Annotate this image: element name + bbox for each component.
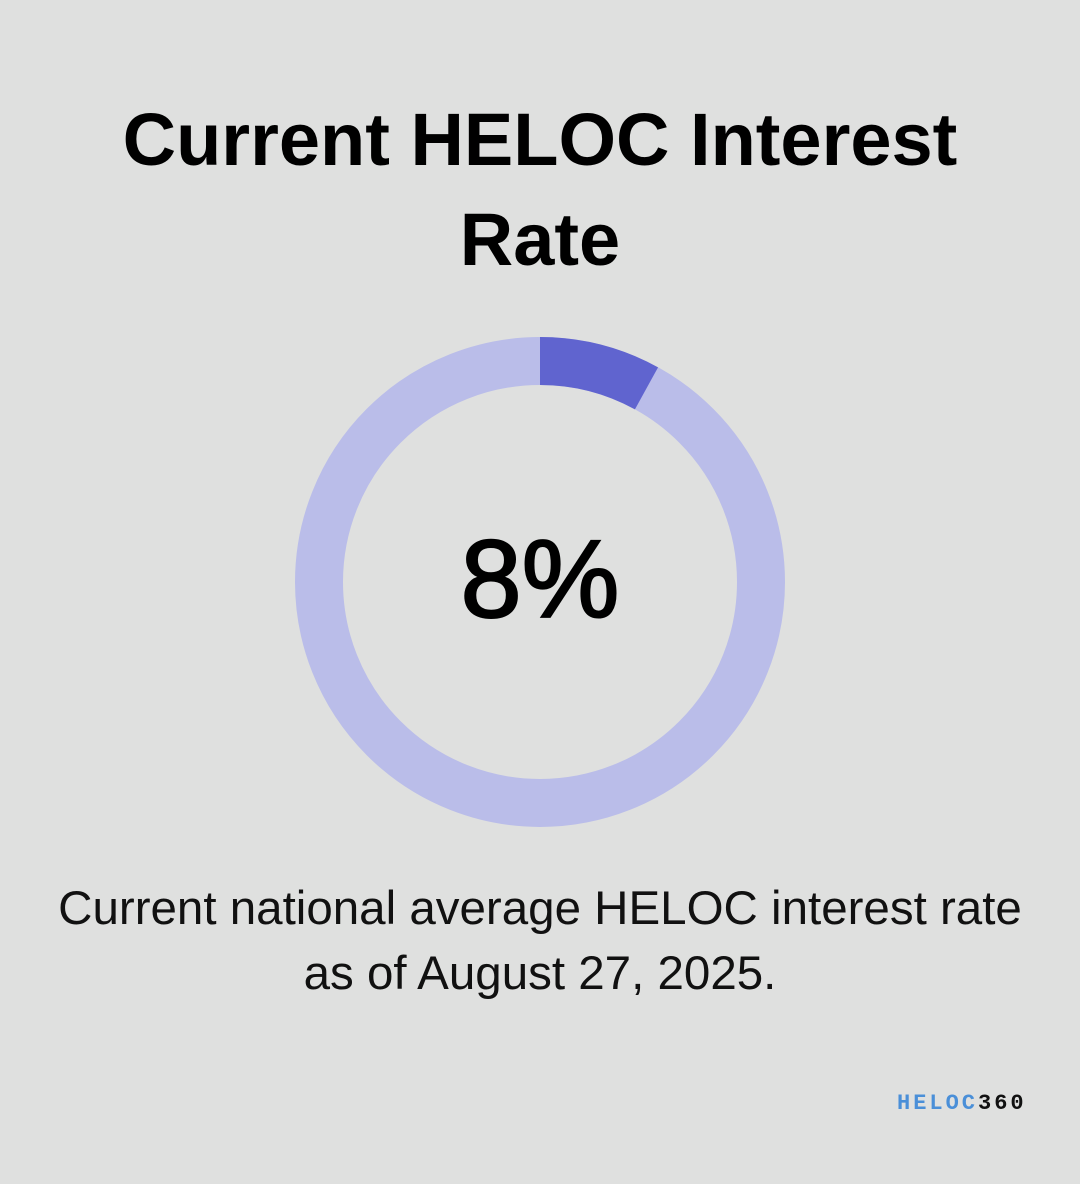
description: Current national average HELOC interest rate <box>58 882 1022 935</box>
title: Current HELOC Interest <box>123 98 957 181</box>
logo: HELOC360 <box>897 1091 1027 1116</box>
description <box>58 882 1022 1000</box>
description: as of August 27, 2025. <box>304 947 776 1000</box>
title: Rate <box>460 198 620 281</box>
title <box>123 98 957 281</box>
value: 8% <box>460 518 619 641</box>
